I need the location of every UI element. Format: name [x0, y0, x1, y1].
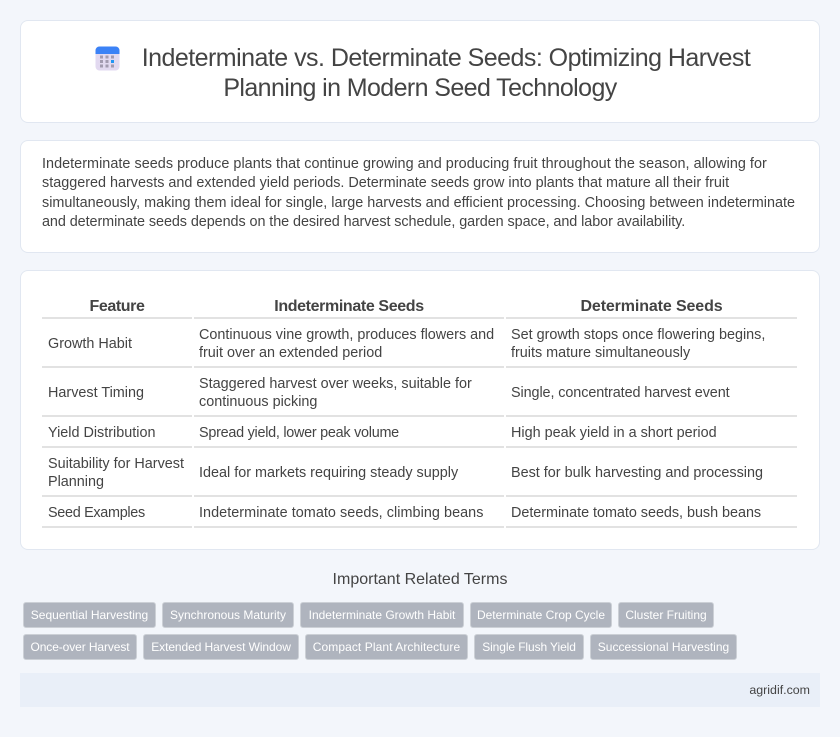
table row: yield distribution — [48, 425, 717, 441]
table row: suitability for harvest planning: Ideal for markets requiring steady supply — [199, 465, 458, 481]
tag list: related terms: Extended Harvest Window — [151, 640, 291, 654]
tag list: related terms: Cluster Fruiting — [625, 608, 707, 622]
table row: yield distribution: Spread yield, lower peak volume — [199, 425, 399, 441]
icon: calendar — [96, 46, 120, 70]
tag list: related terms: Single Flush Yield — [482, 640, 576, 654]
table row: growth habit: fruits mature simultaneously — [511, 345, 690, 361]
table row: growth habit — [48, 327, 765, 361]
table row: growth habit: Set growth stops once flowering begins, — [511, 327, 765, 343]
tag list: related terms: Compact Plant Architecture — [313, 640, 460, 654]
footer bar — [20, 673, 820, 707]
table row: seed examples — [48, 505, 761, 521]
panel: title header — [20, 20, 820, 123]
title — [142, 44, 751, 102]
table row: harvest timing: Harvest Timing — [48, 385, 144, 401]
footer source text: agridif.com — [749, 683, 810, 697]
text block: introduction: simultaneously, making them ideal for single, large harvests and efficient processing. Choosing between indeterminate — [42, 195, 795, 211]
table row: harvest timing: continuous picking — [199, 394, 317, 410]
tag list: related terms: Indeterminate Growth Habit — [309, 608, 455, 622]
table row: harvest timing — [48, 376, 730, 410]
tag list: related terms — [23, 602, 737, 660]
table row: suitability for harvest planning: Planning — [48, 474, 104, 490]
tag list: related terms: Sequential Harvesting — [31, 608, 148, 622]
panel: introduction — [20, 140, 820, 253]
table row: growth habit: fruit over an extended period — [199, 345, 382, 361]
table header row — [90, 298, 723, 315]
title: Indeterminate vs. Determinate Seeds: Optimizing Harvest — [142, 44, 750, 72]
text block: introduction: and determinate seeds depends on the desired harvest schedule, garden space, and labor availability. — [42, 214, 685, 230]
tag list: related terms: Synchronous Maturity — [170, 608, 286, 622]
table row: harvest timing: Single, concentrated harvest event — [511, 385, 730, 401]
text block: introduction — [42, 156, 795, 230]
table row: seed examples: Indeterminate tomato seeds, climbing beans — [199, 505, 483, 521]
text block: introduction: staggered harvests and extended yield periods. Determinate seeds grow into plants that mature all their fruit — [42, 175, 729, 191]
table row: seed examples: Seed Examples — [48, 505, 145, 521]
table header row: Indeterminate Seeds — [274, 298, 424, 315]
text block: introduction: Indeterminate seeds produce plants that continue growing and producing fruit throughout the season, allowing for — [42, 156, 767, 172]
table row: seed examples: Determinate tomato seeds, bush beans — [511, 505, 761, 521]
table row: growth habit: Growth Habit — [48, 336, 132, 352]
tag list: related terms: Determinate Crop Cycle — [477, 608, 605, 622]
tag list: related terms: Successional Harvesting — [598, 640, 729, 654]
table row: yield distribution: High peak yield in a short period — [511, 425, 717, 441]
table row: yield distribution: Yield Distribution — [48, 425, 155, 441]
table row: suitability for harvest planning: Best for bulk harvesting and processing — [511, 465, 763, 481]
tag list: related terms: Once-over Harvest — [30, 640, 130, 654]
table row: suitability for harvest planning: Suitability for Harvest — [48, 456, 184, 472]
table row: suitability for harvest planning — [48, 456, 763, 490]
panel: comparison table — [20, 270, 820, 550]
table header row: Feature — [90, 298, 144, 315]
table header row: Determinate Seeds — [580, 298, 723, 315]
heading: important related terms: Important Related Terms — [333, 571, 507, 588]
table row: growth habit: Continuous vine growth, produces flowers and — [199, 327, 494, 343]
title: Planning in Modern Seed Technology — [223, 74, 617, 102]
table row: harvest timing: Staggered harvest over weeks, suitable for — [199, 376, 472, 392]
